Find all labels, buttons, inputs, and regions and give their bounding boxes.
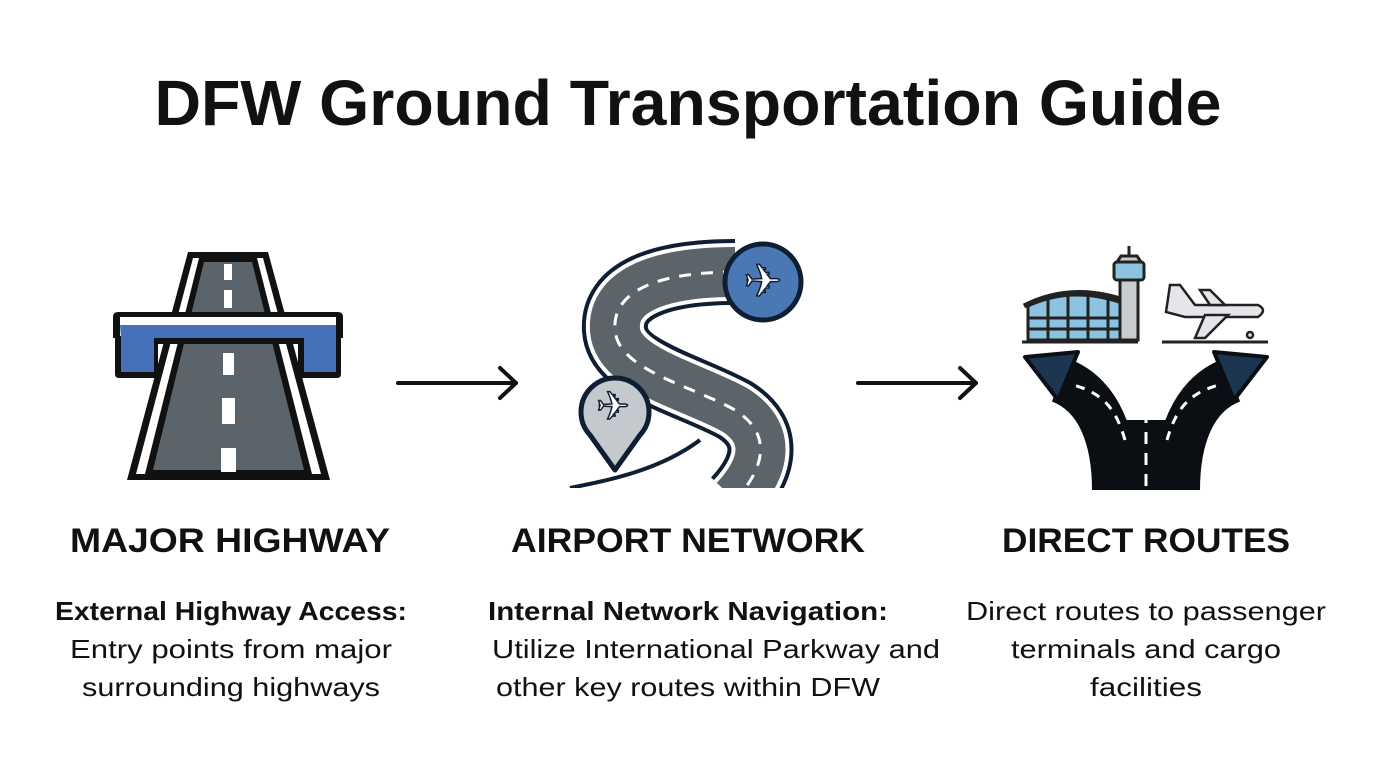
icon: gray pin: [581, 378, 649, 470]
text block: highway: External Highway Access:: [55, 596, 407, 626]
heading: direct routes: DIRECT ROUTES: [1002, 522, 1290, 560]
fork roads: [1060, 380, 1232, 490]
text block: network: Internal Network Navigation:: [488, 596, 888, 626]
heading: major highway: MAJOR HIGHWAY: [70, 522, 390, 560]
icon: direct routes: [1022, 246, 1268, 490]
text block: network: Utilize International Parkway and: [492, 634, 940, 664]
plane: [1166, 285, 1263, 338]
icon: gray pin: ✈: [596, 384, 630, 430]
text block: highway: surrounding highways: [82, 672, 380, 702]
arrow 2: [858, 368, 976, 398]
icon: blue airport circle: [725, 244, 801, 320]
text block: direct: terminals and cargo: [1011, 634, 1281, 664]
text block: direct: facilities: [1090, 672, 1202, 702]
icon: major highway: [113, 252, 343, 480]
arrow 1: [398, 368, 516, 398]
heading: airport network: AIRPORT NETWORK: [511, 522, 865, 560]
text block: direct: [966, 596, 1326, 702]
title: DFW Ground Transportation Guide: [154, 67, 1222, 139]
text block: direct: Direct routes to passenger: [966, 596, 1326, 626]
text block: network: other key routes within DFW: [496, 672, 881, 702]
terminal: [1024, 246, 1144, 340]
icon: airport network: [570, 244, 801, 500]
text block: network: [488, 596, 940, 702]
text block: highway: [55, 596, 407, 702]
icon: blue airport circle: ✈: [744, 254, 782, 308]
text block: highway: Entry points from major: [70, 634, 392, 664]
